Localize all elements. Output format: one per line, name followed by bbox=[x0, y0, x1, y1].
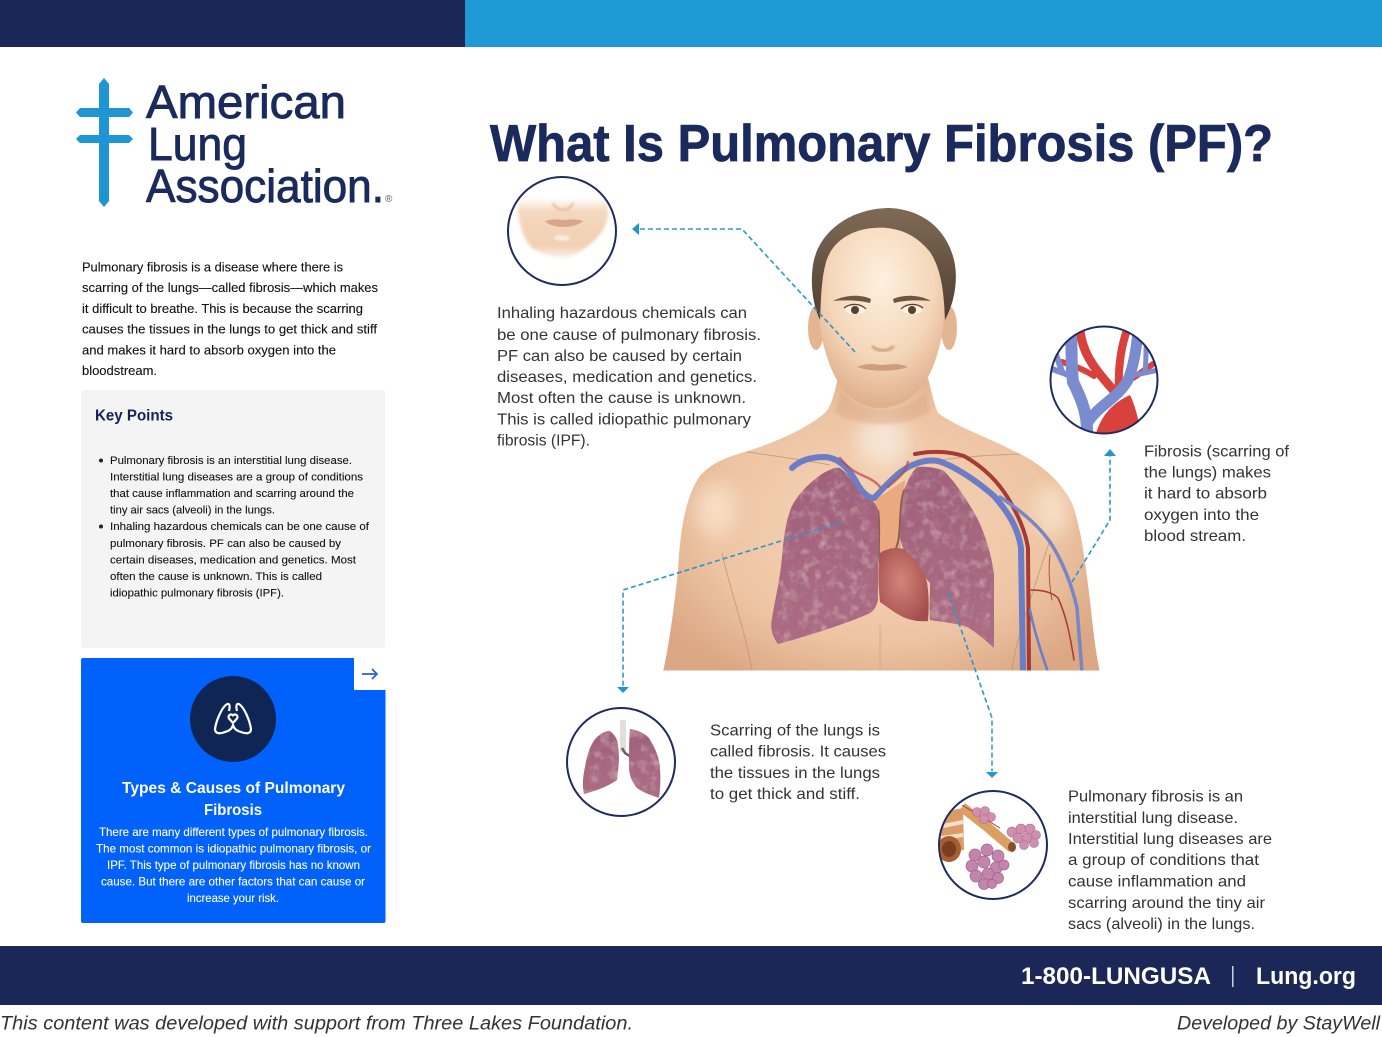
text: absorption callout: it hard to absorb bbox=[1144, 486, 1267, 502]
text: chemicals callout: Inhaling hazardous chemicals can bbox=[497, 305, 747, 322]
text: scarring callout bbox=[710, 722, 886, 803]
icon: lungs circle bbox=[567, 708, 675, 816]
sternum hair bbox=[880, 625, 881, 670]
card body text: cause. But there are other factors that can cause or bbox=[101, 874, 365, 888]
key points list: often the cause is unknown. This is called bbox=[110, 571, 322, 583]
right lung bbox=[900, 467, 994, 648]
key points heading: Key Points bbox=[95, 408, 173, 424]
top colour band bbox=[0, 0, 1382, 47]
illustration: human torso with lungs bbox=[663, 208, 1100, 672]
key points list: Inhaling hazardous chemicals can be one cause of bbox=[110, 521, 370, 533]
text: scarring callout: Scarring of the lungs is bbox=[710, 722, 880, 740]
text: interstitial callout: scarring around the tiny air bbox=[1068, 895, 1266, 912]
text: interstitial callout: a group of conditions that bbox=[1068, 852, 1260, 869]
text: chemicals callout: This is called idiopathic pulmonary bbox=[497, 412, 751, 428]
logo: American Lung Association bbox=[76, 76, 393, 212]
panel: types and causes card bbox=[81, 657, 386, 923]
logo wordmark: Lung bbox=[148, 118, 247, 170]
logo wordmark: American bbox=[146, 76, 346, 128]
icon: face circle bbox=[508, 177, 616, 285]
separator bbox=[1232, 966, 1234, 987]
intro paragraph: and makes it hard to absorb oxygen into the bbox=[82, 342, 336, 358]
text: interstitial callout: cause inflammation and bbox=[1068, 874, 1246, 890]
credit: developer: Developed by StayWell bbox=[1177, 1014, 1381, 1034]
icon: double-barred cross bbox=[76, 78, 133, 207]
key points list: idiopathic pulmonary fibrosis (IPF). bbox=[110, 588, 284, 600]
text: chemicals callout: diseases, medication and genetics. bbox=[497, 369, 757, 386]
text: chemicals callout: be one cause of pulmonary fibrosis. bbox=[497, 327, 761, 344]
chin shadow bbox=[834, 392, 930, 424]
text: chemicals callout: PF can also be caused by certain bbox=[497, 348, 742, 365]
key points list: Pulmonary fibrosis is an interstitial lung disease. bbox=[110, 455, 352, 467]
torso bbox=[663, 378, 1100, 672]
icon: blood vessels circle bbox=[1050, 326, 1160, 436]
card heading bbox=[122, 780, 345, 819]
blood vessels bbox=[792, 452, 1082, 672]
card heading: Types & Causes of Pulmonary bbox=[122, 780, 345, 797]
intro paragraph: Pulmonary fibrosis is a disease where there is bbox=[82, 260, 343, 274]
leader line: arm to absorption callout bbox=[1072, 449, 1116, 582]
intro paragraph: bloodstream. bbox=[82, 363, 157, 378]
text: absorption callout bbox=[1144, 444, 1290, 545]
left lung bbox=[771, 468, 878, 644]
card body text: increase your risk. bbox=[187, 891, 279, 905]
facial features bbox=[833, 296, 931, 371]
text: chemicals callout bbox=[497, 305, 761, 450]
panel: key points bbox=[81, 390, 385, 648]
intro paragraph: scarring of the lungs—called fibrosis—which makes bbox=[82, 280, 378, 295]
card body text: There are many different types of pulmonary fibrosis. bbox=[99, 825, 368, 839]
intro paragraph: causes the tissues in the lungs to get thick and stiff bbox=[82, 322, 377, 336]
title: What Is Pulmonary Fibrosis (PF)? bbox=[490, 115, 1273, 173]
phone number: 1-800-LUNGUSA bbox=[1021, 963, 1211, 990]
footer band bbox=[0, 946, 1382, 1005]
intro paragraph bbox=[82, 260, 378, 378]
text: interstitial callout: interstitial lung disease. bbox=[1068, 810, 1238, 827]
text: interstitial callout bbox=[1068, 788, 1272, 933]
key points list: certain diseases, medication and genetics. Most bbox=[110, 554, 357, 566]
text: chemicals callout: fibrosis (IPF). bbox=[497, 432, 590, 450]
ears bbox=[808, 306, 957, 350]
key points list: Interstitial lung diseases are a group of conditions bbox=[110, 472, 363, 484]
logo wordmark bbox=[146, 76, 393, 212]
arm creases bbox=[722, 452, 1050, 670]
card heading: Fibrosis bbox=[204, 802, 262, 819]
mediastinum bbox=[875, 480, 905, 560]
leader line: lung to interstitial callout bbox=[948, 592, 998, 778]
card body text: The most common is idiopathic pulmonary fibrosis, or bbox=[96, 842, 371, 856]
text: absorption callout: the lungs) makes bbox=[1144, 464, 1271, 482]
key points list: that cause inflammation and scarring around the bbox=[110, 488, 354, 500]
text: interstitial callout: sacs (alveoli) in the lungs. bbox=[1068, 916, 1255, 933]
key points list: tiny air sacs (alveoli) in the lungs. bbox=[110, 504, 275, 516]
text: absorption callout: blood stream. bbox=[1144, 528, 1246, 545]
leader line: face to chemicals callout bbox=[632, 223, 855, 352]
key points list bbox=[99, 455, 370, 600]
logo wordmark: ® bbox=[385, 194, 393, 205]
text: scarring callout: the tissues in the lungs bbox=[710, 765, 880, 782]
intro paragraph: it difficult to breathe. This is because the scarring bbox=[82, 301, 363, 316]
key points list: pulmonary fibrosis. PF can also be caused by bbox=[110, 538, 341, 550]
arrow tab bbox=[354, 657, 386, 690]
card body text bbox=[96, 825, 371, 905]
leader line: lungs to scarring callout bbox=[617, 522, 842, 693]
head bbox=[818, 222, 945, 408]
website: Lung.org bbox=[1256, 963, 1356, 990]
text: interstitial callout: Interstitial lung diseases are bbox=[1068, 831, 1272, 848]
text: absorption callout: oxygen into the bbox=[1144, 507, 1259, 524]
text: scarring callout: to get thick and stiff. bbox=[710, 786, 860, 803]
logo wordmark: Association. bbox=[146, 160, 384, 212]
icon: lungs in navy circle bbox=[190, 676, 276, 762]
text: interstitial callout: Pulmonary fibrosis is an bbox=[1068, 788, 1243, 806]
hair bbox=[812, 208, 956, 320]
heart bbox=[878, 548, 929, 621]
text: chemicals callout: Most often the cause is unknown. bbox=[497, 390, 746, 407]
text: absorption callout: Fibrosis (scarring of bbox=[1144, 444, 1290, 460]
icon: alveoli circle bbox=[937, 791, 1047, 899]
shoulder highlights bbox=[696, 414, 1070, 536]
credit: funding: This content was developed with support from Three Lakes Foundation. bbox=[0, 1014, 633, 1034]
text: scarring callout: called fibrosis. It causes bbox=[710, 744, 886, 760]
card body text: IPF. This type of pulmonary fibrosis has no known bbox=[107, 858, 360, 872]
